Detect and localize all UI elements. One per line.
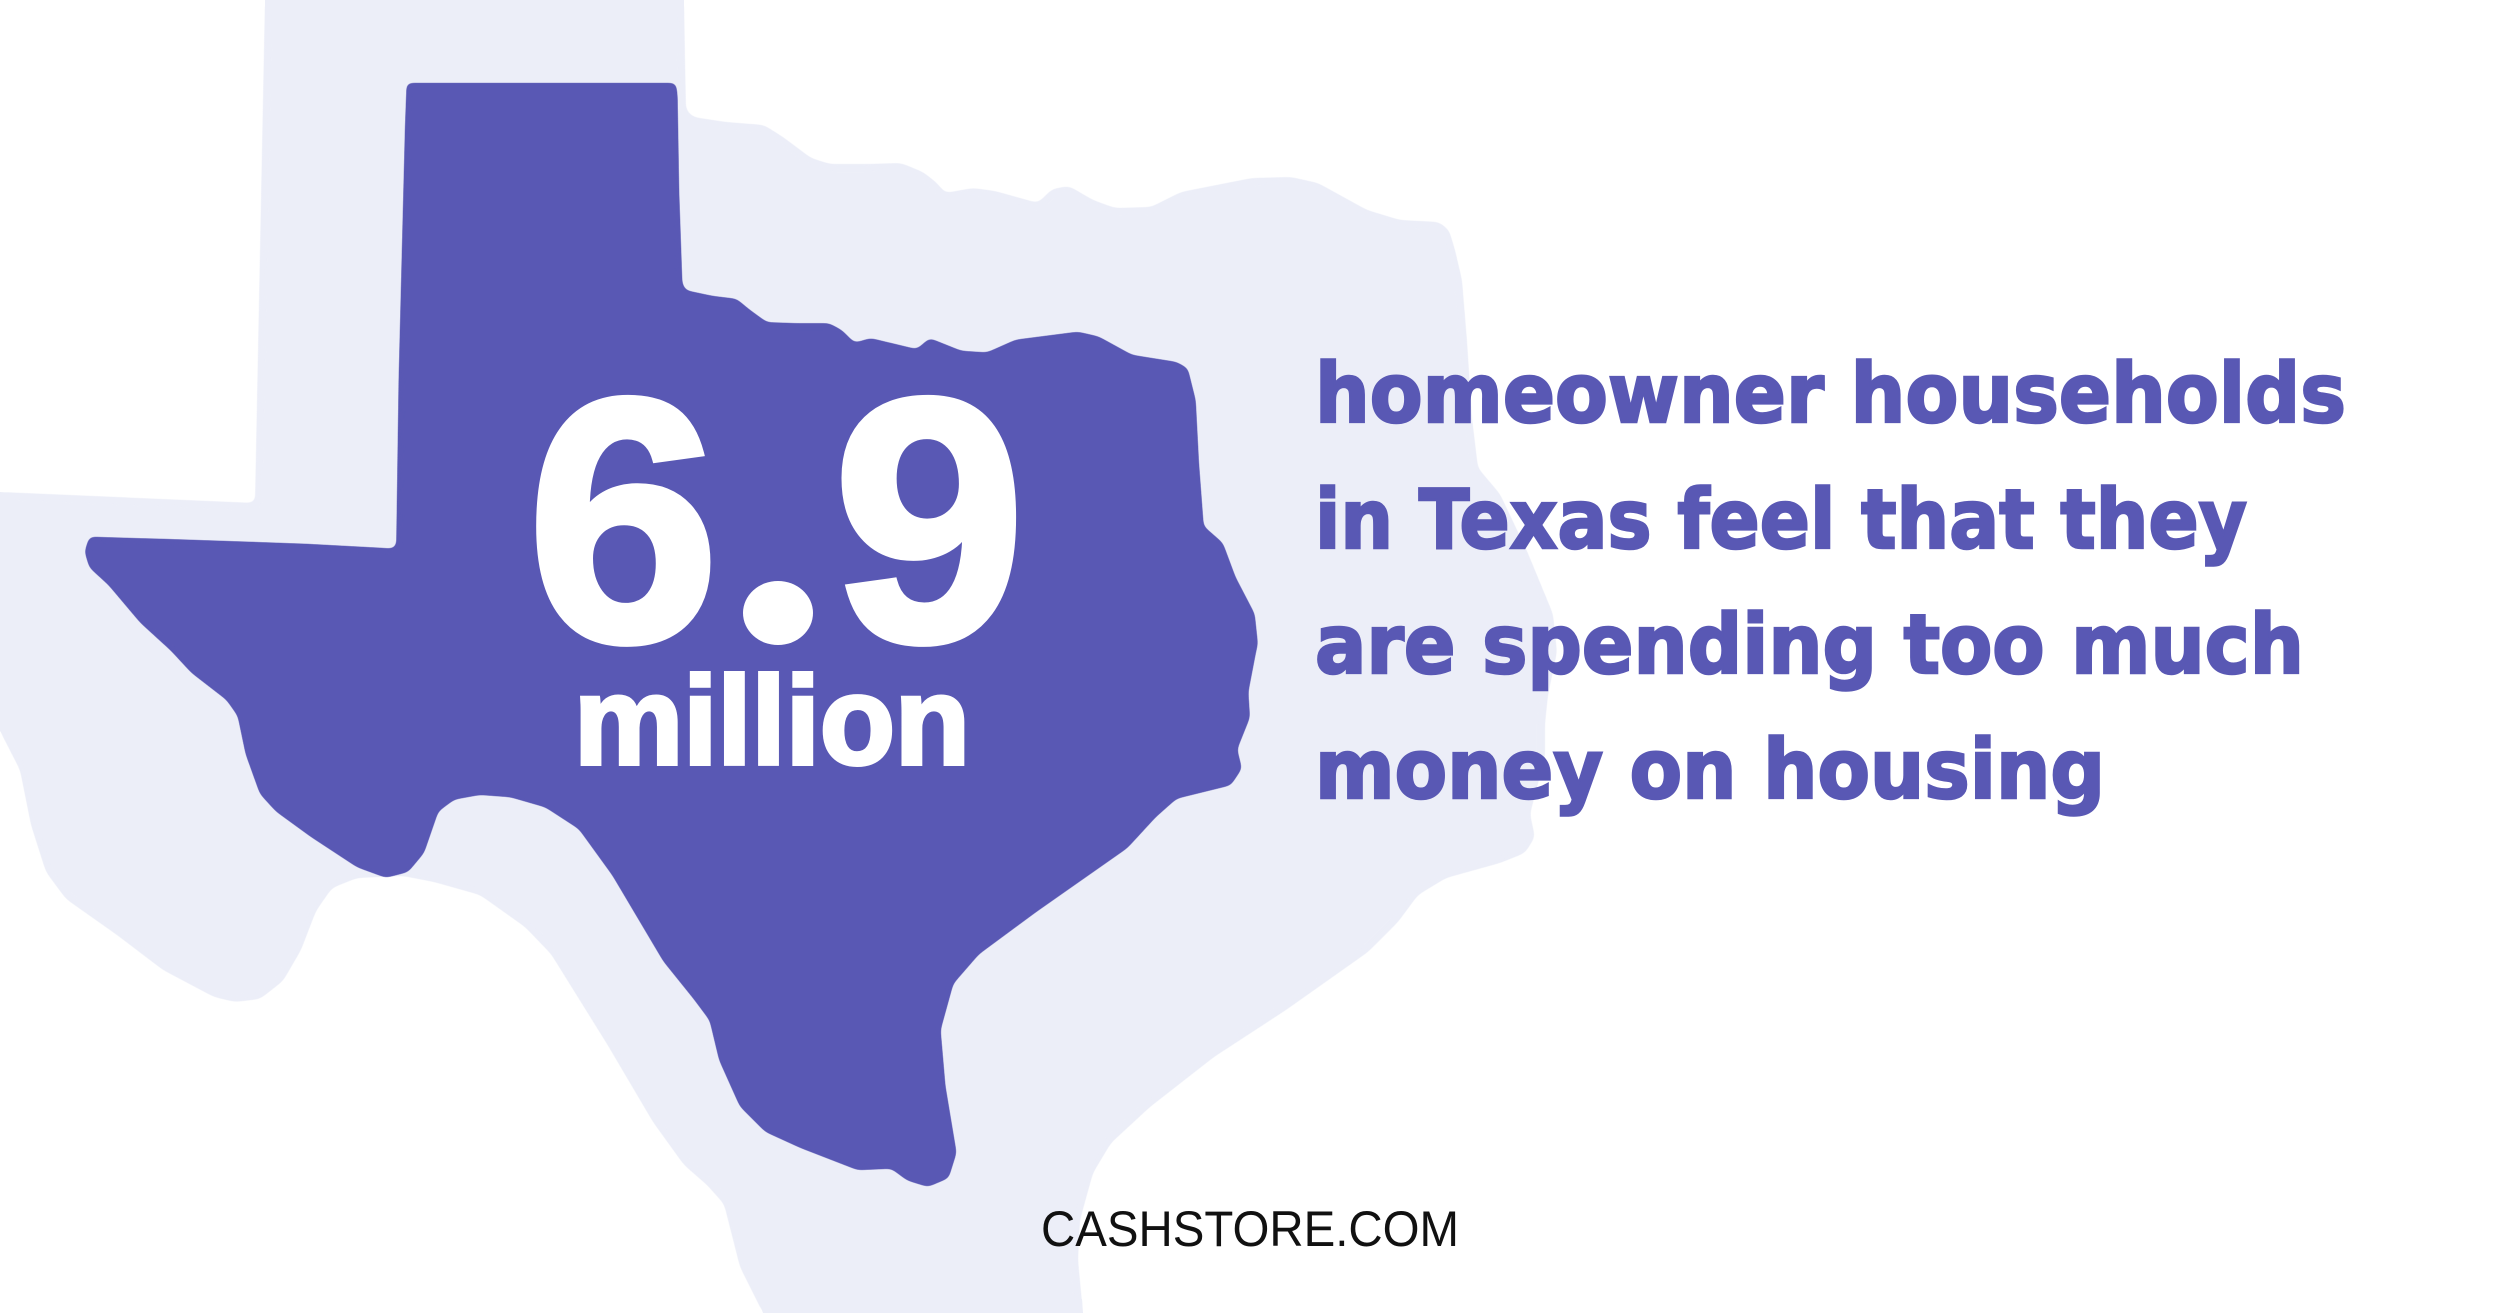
map: enlarged pale Texas silhouette: [0, 0, 1557, 1313]
statement text: [1315, 347, 2346, 818]
statement text: homeowner households: [1315, 347, 2346, 442]
big number: 6: [527, 328, 719, 714]
big number: [527, 328, 1025, 714]
website credit: CASHSTORE.COM: [1041, 1201, 1459, 1257]
map: Texas silhouette: [85, 83, 1258, 1187]
big number: 9: [833, 328, 1025, 714]
statement text: in Texas feel that they: [1315, 473, 2247, 568]
statement text: money on housing: [1315, 723, 2105, 818]
statement text: are spending too much: [1315, 598, 2304, 693]
big number: .: [743, 404, 812, 683]
unit label: million: [574, 652, 970, 791]
